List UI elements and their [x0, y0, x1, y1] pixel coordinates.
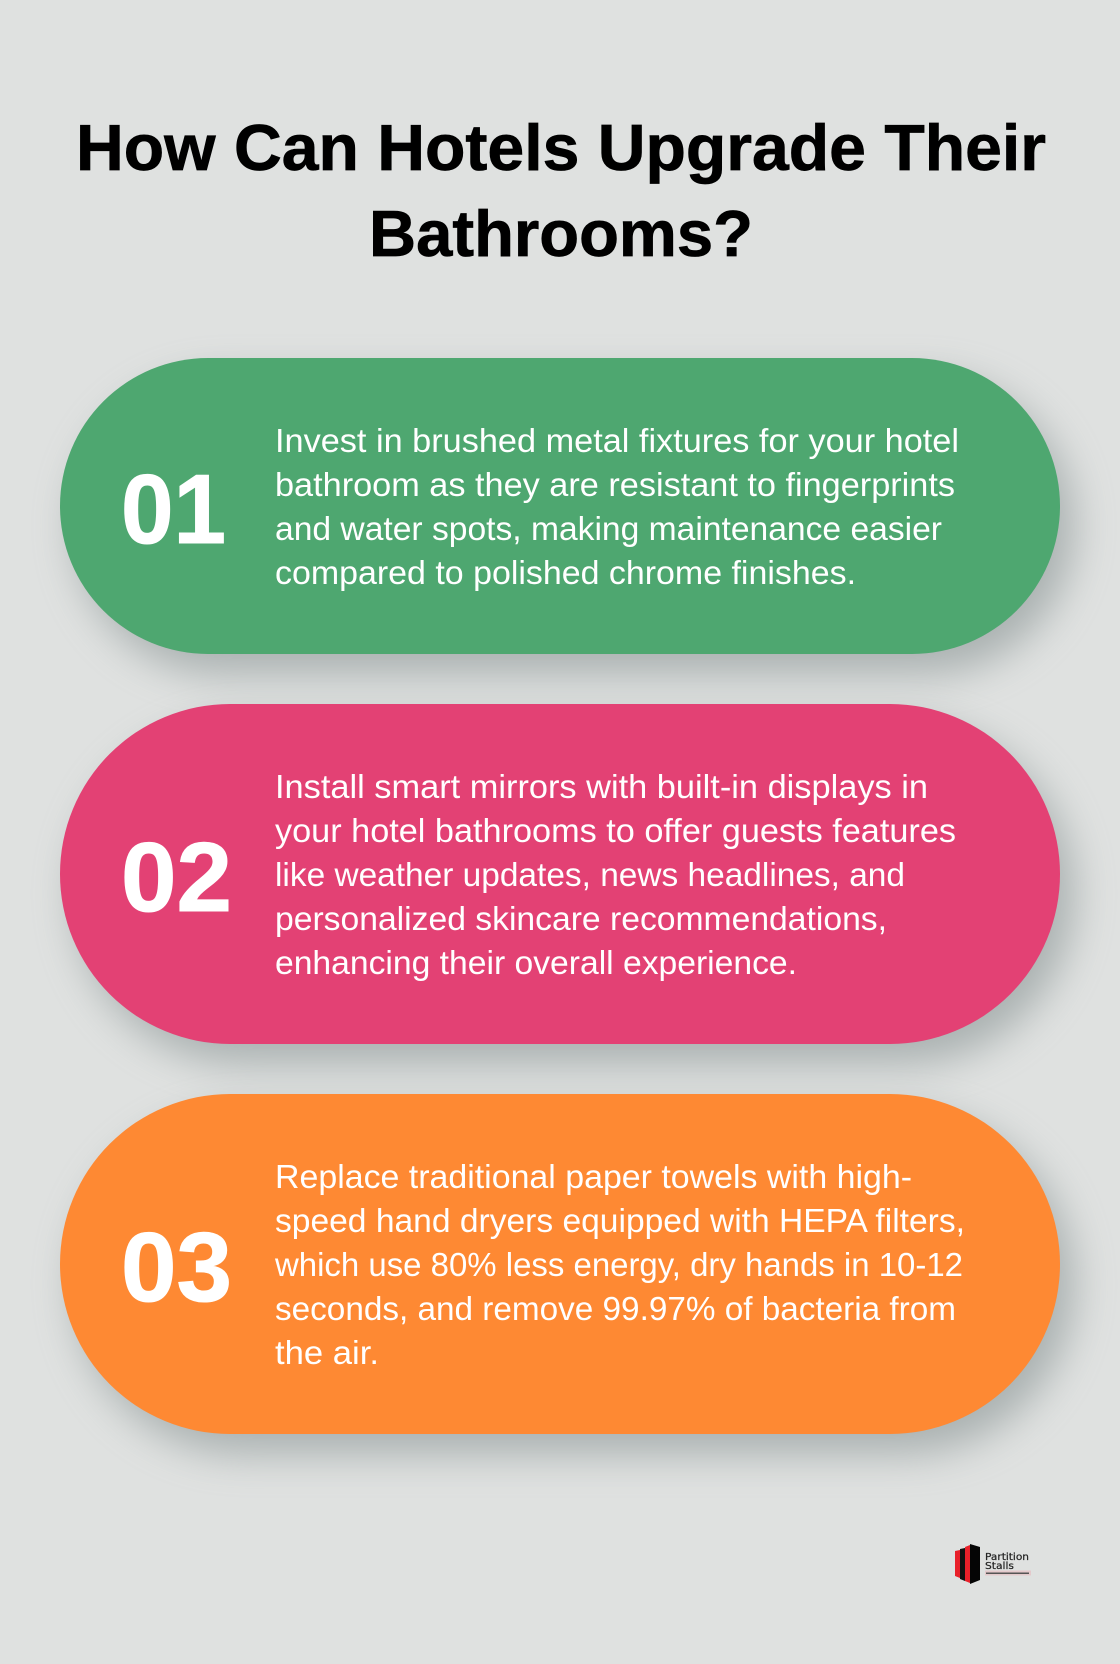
text block 03	[274, 1158, 965, 1371]
panel: step 03	[60, 1094, 1074, 1454]
text block 03: seconds, and remove 99.97% of bacteria from	[275, 1290, 956, 1327]
number 03: 03	[121, 1212, 232, 1322]
title	[76, 111, 1046, 270]
text block 02: enhancing their overall experience.	[275, 944, 797, 981]
text block 02: personalized skincare recommendations,	[275, 900, 887, 937]
text block 01	[275, 422, 959, 591]
brand name: Partition	[985, 1552, 1029, 1563]
text block 03: Replace traditional paper towels with high-	[275, 1158, 912, 1195]
text block 02: like weather updates, news headlines, and	[275, 856, 905, 893]
orange pill	[60, 1094, 1060, 1434]
text block 01: compared to polished chrome finishes.	[275, 554, 856, 591]
text block 03: which use 80% less energy, dry hands in 10-12	[274, 1246, 963, 1283]
title: How Can Hotels Upgrade Their	[76, 111, 1046, 184]
panel: step 02	[60, 704, 1074, 1064]
text block 02: Install smart mirrors with built-in displays in	[275, 768, 928, 805]
text block 01: and water spots, making maintenance easier	[275, 510, 942, 547]
green pill	[60, 358, 1060, 654]
text block 03: speed hand dryers equipped with HEPA filters,	[275, 1202, 965, 1239]
text block 02	[275, 768, 956, 981]
logo: Partition Stalls	[955, 1544, 1031, 1584]
icon: partition bars	[955, 1544, 980, 1584]
logo: Partition Stalls: Stalls	[985, 1561, 1014, 1572]
number 02: 02	[121, 822, 232, 932]
text block 03: the air.	[275, 1334, 379, 1371]
text block 01: bathroom as they are resistant to fingerprints	[275, 466, 955, 503]
panel: step 01	[60, 358, 1074, 674]
pink pill	[60, 704, 1060, 1044]
title: Bathrooms?	[369, 197, 753, 270]
text block 01: Invest in brushed metal fixtures for your hotel	[275, 422, 959, 459]
text block 02: your hotel bathrooms to offer guests features	[275, 812, 956, 849]
number 01: 01	[121, 454, 226, 564]
